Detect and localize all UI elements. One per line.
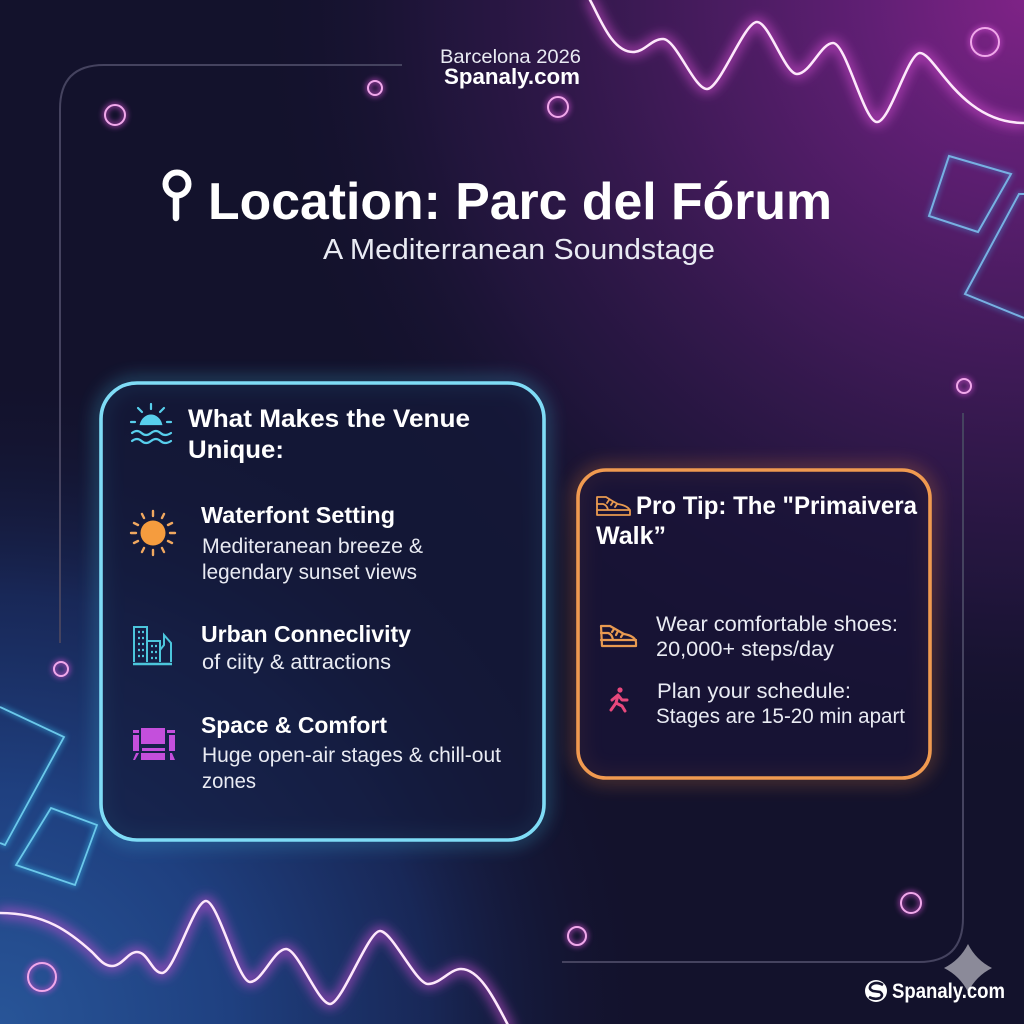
heading: what makes the venue unique: What Makes the Venue [188,405,470,433]
icon: sun over waves [131,404,171,443]
icon: location pin [166,172,188,218]
panel: what makes the venue unique [101,383,544,840]
neon wave: bottom left [0,901,510,1024]
heading: what makes the venue unique [188,405,470,464]
heading: what makes the venue unique: Unique: [188,436,284,464]
item: waterfront setting: legendary sunset views [202,561,417,584]
header brand text [440,46,581,89]
icon: sneaker small [597,497,630,515]
tip: plan your schedule [656,680,905,728]
neon wave: top right [590,0,1024,123]
item: space and comfort: Space & Comfort [201,712,387,738]
tip: plan your schedule: Plan your schedule: [657,680,851,703]
item: urban connectivity: of ciity & attractions [202,651,391,674]
neon squares: bottom left [0,707,97,885]
heading: pro tip: Pro Tip: The "Primaivera [636,492,918,520]
footer logo: Spanaly.com [892,980,1005,1003]
item: urban connectivity [201,621,411,674]
title: Location: Parc del Fórum [208,173,832,231]
icon: sparkle star [944,944,992,992]
item: waterfront setting [201,502,423,584]
header brand text: Spanaly.com [444,64,580,89]
icon: city buildings [133,627,172,664]
heading: pro tip [596,492,918,550]
tip: comfortable shoes: Wear comfortable shoes: [656,613,898,636]
header brand text: Barcelona 2026 [440,46,581,68]
item: waterfront setting: Mediteranean breeze & [202,535,423,558]
item: space and comfort [201,712,501,793]
panel: pro tip [578,470,930,778]
heading: pro tip: Walk” [596,522,666,550]
decorative frame lines [60,65,963,962]
tip: comfortable shoes [656,613,898,661]
icon: sun [131,511,175,555]
item: urban connectivity: Urban Conneclivity [201,621,411,647]
item: space and comfort: zones [202,770,256,793]
icon: sofa [133,728,175,760]
tip: comfortable shoes: 20,000+ steps/day [656,638,835,661]
tip: plan your schedule: Stages are 15-20 min apart [656,705,905,728]
subtitle: A Mediterranean Soundstage [323,234,715,266]
neon squares: top right [929,156,1024,318]
item: space and comfort: Huge open-air stages & chill-out [202,744,501,767]
icon: walking person [611,687,627,711]
item: waterfront setting: Waterfont Setting [201,502,395,528]
icon: sneaker [601,626,636,646]
